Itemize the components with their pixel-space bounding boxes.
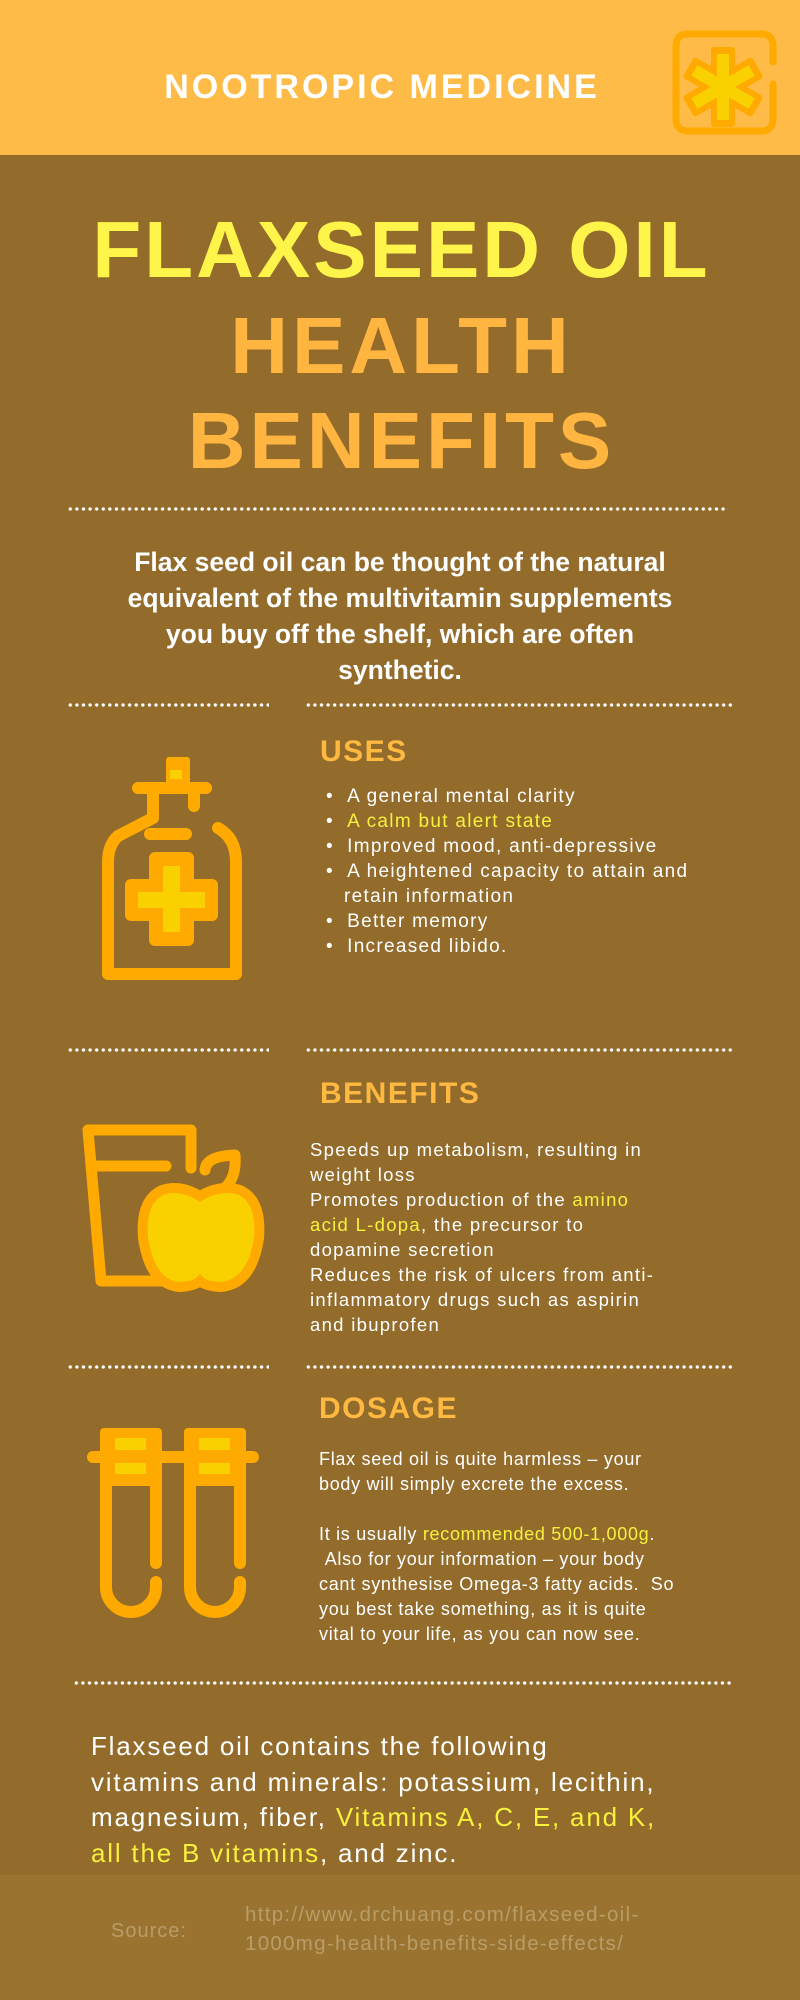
list: uses: • A general mental clarity (326, 786, 576, 807)
text: benefits: dopamine secretion (310, 1239, 495, 1260)
icon: test tubes (87, 1428, 259, 1618)
list: uses (326, 786, 688, 957)
intro text: Flax seed oil can be thought of the natural (134, 547, 666, 577)
text: dosage: you best take something, as it is quite (319, 1599, 646, 1619)
heading: uses: USES (320, 735, 408, 768)
text: dosage (319, 1449, 674, 1644)
text: dosage: cant synthesise Omega-3 fatty acids. So (319, 1574, 674, 1594)
text: vitamins and minerals: vitamins and minerals: potassium, lecithin, (91, 1766, 655, 1796)
intro text: synthetic. (338, 655, 462, 685)
heading: benefits: BENEFITS (320, 1077, 480, 1110)
text: benefits: weight loss (310, 1164, 416, 1185)
footer: source: 1000mg-health-benefits-side-effects/ (245, 1932, 624, 1955)
text: benefits: inflammatory drugs such as aspirin (310, 1289, 640, 1310)
text: vitamins and minerals: Flaxseed oil contains the following (91, 1731, 549, 1761)
text: benefits (310, 1139, 654, 1335)
intro text: equivalent of the multivitamin supplements (128, 583, 672, 613)
footer: source (0, 1875, 800, 2000)
text: benefits: and ibuprofen (310, 1314, 440, 1335)
text: benefits: Reduces the risk of ulcers from anti- (310, 1264, 654, 1285)
footer: source: http://www.drchuang.com/flaxseed-oil- (245, 1903, 639, 1926)
icon: bottle (102, 757, 242, 980)
main title: HEALTH (230, 300, 573, 390)
text: benefits: Promotes production of the amino (310, 1189, 629, 1210)
icon: medical star (672, 30, 776, 134)
text: vitamins and minerals (91, 1731, 656, 1868)
panel: uses (102, 735, 688, 980)
text: dosage: vital to your life, as you can now see. (319, 1624, 640, 1644)
footer: source: Source: (111, 1920, 187, 1942)
text: dosage: Flax seed oil is quite harmless – your (319, 1449, 642, 1469)
icon: glass and apple (82, 1124, 264, 1292)
text: dosage: body will simply excrete the excess. (319, 1474, 629, 1494)
heading: dosage: DOSAGE (319, 1392, 458, 1425)
main title: BENEFITS (188, 396, 615, 485)
panel: dosage (87, 1392, 674, 1644)
main title (92, 205, 711, 485)
intro text (128, 547, 672, 685)
text: benefits: acid L-dopa, the precursor to (310, 1214, 584, 1235)
text: dosage: It is usually recommended 500-1,000g. (319, 1524, 655, 1544)
text: vitamins and minerals: all the B vitamins, and zinc. (91, 1838, 458, 1868)
panel: benefits (82, 1077, 654, 1335)
text: dosage: Also for your information – your body (325, 1549, 645, 1569)
list: uses: • A heightened capacity to attain and (326, 861, 688, 882)
list: uses: retain information (344, 886, 514, 907)
list: uses: • A calm but alert state (326, 811, 553, 832)
header bar (0, 0, 800, 155)
intro text: you buy off the shelf, which are often (166, 619, 634, 649)
main title: FLAXSEED OIL (92, 205, 711, 294)
list: uses: • Better memory (326, 911, 489, 932)
list: uses: • Improved mood, anti-depressive (326, 836, 658, 857)
list: uses: • Increased libido. (326, 936, 508, 957)
text: vitamins and minerals: magnesium, fiber, Vitamins A, C, E, and K, (91, 1802, 656, 1832)
text: benefits: Speeds up metabolism, resulting in (310, 1139, 642, 1160)
header title: NOOTROPIC MEDICINE (164, 68, 600, 106)
